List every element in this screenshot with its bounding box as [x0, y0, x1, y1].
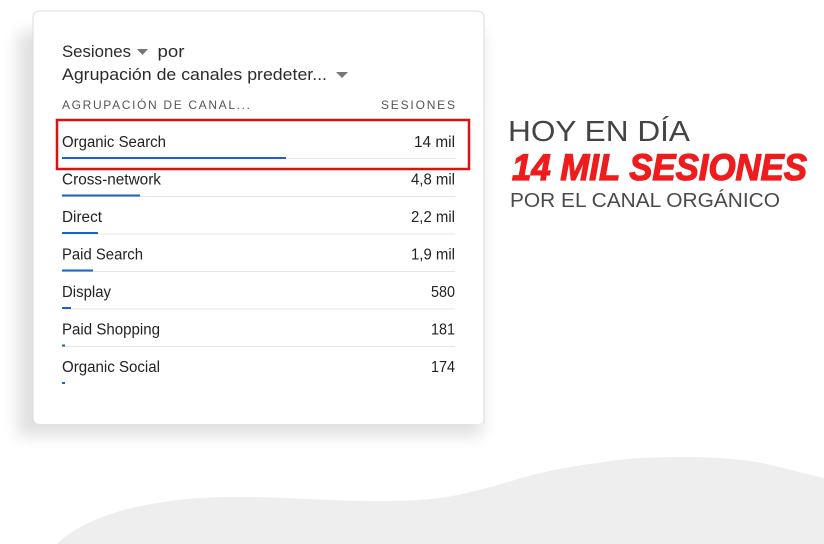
column headers: AGRUPACIÓN DE CANAL... — [62, 97, 250, 112]
row: Cross-network: 4,8 mil — [411, 172, 455, 188]
row: Paid Search: Paid Search — [62, 246, 143, 264]
row: Display: Display — [62, 284, 111, 301]
row: Display — [62, 284, 455, 310]
row: Paid Shopping: 181 — [431, 322, 455, 338]
callout line: 14 mil sesiones: 14 MIL SESIONES — [512, 147, 807, 188]
background wave — [57, 457, 824, 544]
panel: sessions table card — [18, 11, 484, 436]
row: Organic Social: Organic Social — [62, 359, 160, 376]
row: Organic Social: 174 — [431, 359, 455, 376]
column headers: SESIONES — [381, 98, 455, 112]
column headers — [62, 97, 455, 112]
row: Paid Shopping — [62, 322, 455, 347]
row: Paid Search — [62, 246, 455, 272]
row: Organic Search: Organic Search — [62, 134, 166, 151]
card heading: Sesiones — [62, 43, 131, 61]
callout line: hoy en dia: HOY EN DÍA — [508, 115, 691, 148]
row: Paid Shopping: Paid Shopping — [62, 322, 160, 338]
card heading — [62, 43, 348, 84]
row: Display: 580 — [431, 284, 455, 301]
row: Organic Search: 14 mil — [414, 134, 455, 151]
callout text — [508, 115, 807, 212]
row: Organic Social — [62, 359, 455, 384]
card heading: por — [158, 43, 185, 61]
row: Direct — [62, 209, 455, 234]
red highlight box — [57, 120, 469, 169]
card heading: Agrupación de canales predeter... — [62, 66, 327, 84]
callout line: por el canal organico: POR EL CANAL ORGÁNICO — [510, 189, 780, 212]
row: Direct: Direct — [62, 209, 103, 226]
row: Cross-network — [62, 172, 455, 197]
row: Direct: 2,2 mil — [411, 209, 455, 226]
row: Organic Search — [62, 134, 455, 159]
row: Cross-network: Cross-network — [62, 172, 161, 188]
row: Paid Search: 1,9 mil — [411, 246, 455, 264]
